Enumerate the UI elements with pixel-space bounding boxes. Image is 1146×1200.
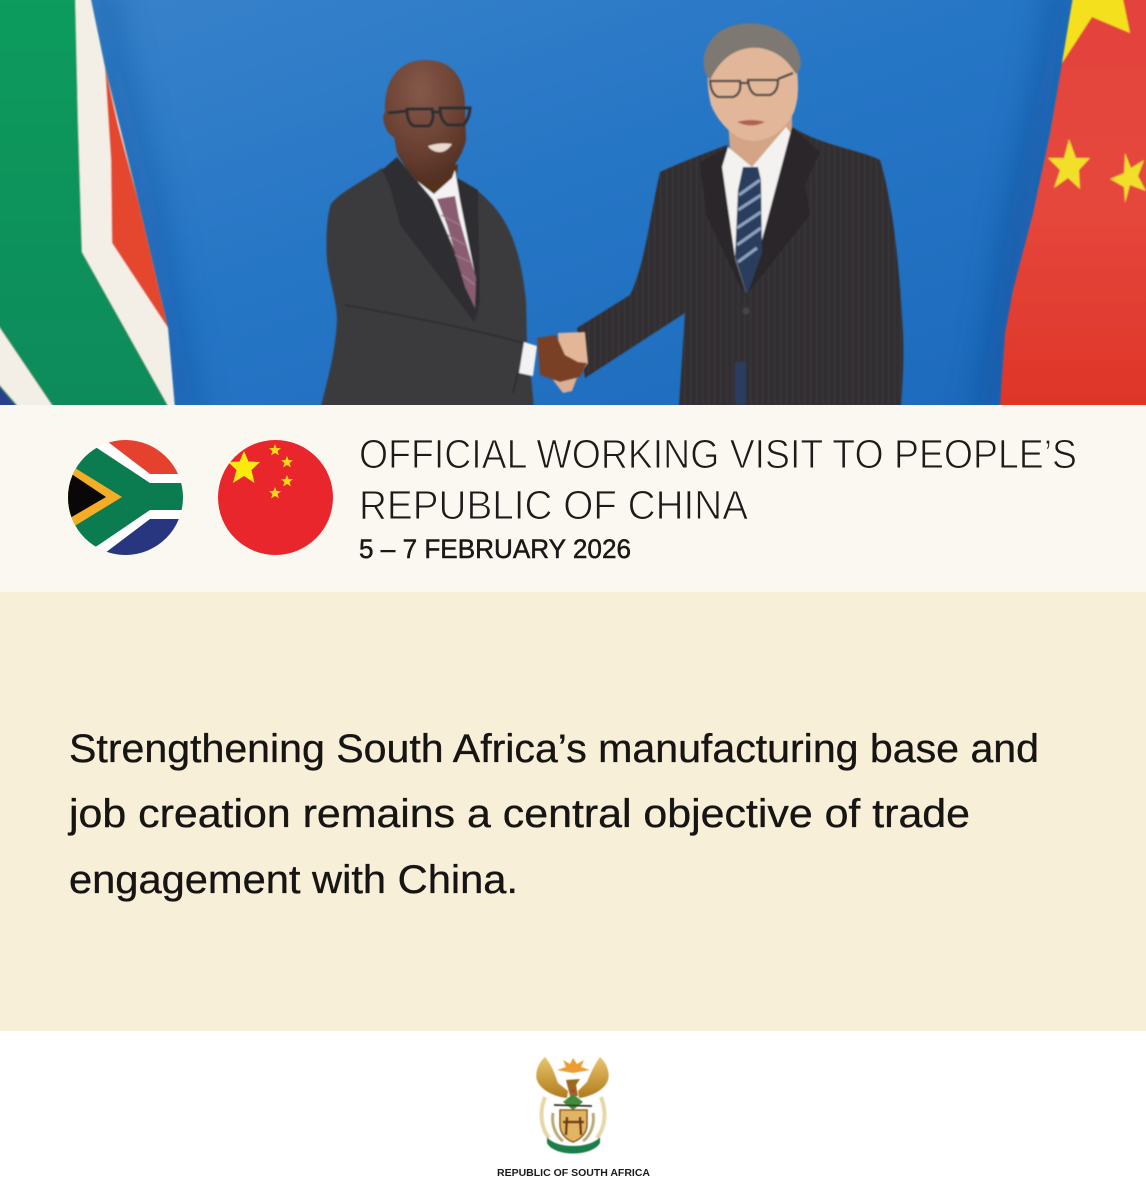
photo: two officials shaking hands between national flags (0, 0, 1146, 420)
hair (704, 23, 801, 80)
shirt (722, 127, 792, 292)
head (383, 60, 466, 182)
shirt (410, 170, 476, 272)
flag: South Africa draped (0, 0, 176, 420)
jacket (577, 127, 903, 420)
panel: statement (0, 592, 1146, 1031)
jacket (318, 168, 535, 420)
shield (560, 1110, 587, 1142)
heading: visit title: REPUBLIC OF CHINA (359, 482, 749, 528)
header band (0, 405, 1146, 592)
text: central statement (68, 727, 1039, 902)
tie (437, 196, 476, 308)
text: central statement: engagement with China. (69, 858, 518, 902)
icon: South African coat of arms (536, 1057, 609, 1154)
glasses (388, 108, 470, 126)
text: central statement: job creation remains a central objective of trade (68, 792, 970, 836)
text: central statement: Strengthening South Africa’s manufacturing base and (69, 727, 1039, 771)
wheat (553, 1113, 593, 1141)
side arcs (542, 1097, 549, 1138)
sun (557, 1058, 590, 1073)
button (742, 308, 750, 314)
sleeve crease and cuff (345, 305, 537, 393)
flag: China draped (999, 0, 1146, 420)
text: visit dates: 5 – 7 FEBRUARY 2026 (359, 534, 631, 564)
heading: visit title (359, 431, 1077, 528)
mouth (428, 143, 452, 152)
icon: South African flag circle (68, 440, 183, 555)
motto ribbon (547, 1137, 600, 1154)
secretary bird (566, 1079, 580, 1096)
tie (735, 167, 762, 295)
neck (398, 155, 458, 197)
person: right official (577, 23, 903, 420)
heading: visit title: OFFICIAL WORKING VISIT TO PEOPLE’S (359, 431, 1077, 477)
mouth (737, 120, 765, 126)
glasses (710, 73, 793, 97)
clasped hands (537, 332, 588, 393)
text: Republic of South Africa: REPUBLIC OF SOUTH AFRICA (497, 1167, 650, 1179)
spear and knobkerrie (554, 1105, 592, 1106)
lapels (702, 147, 740, 284)
head (708, 47, 798, 141)
neck (728, 116, 794, 168)
wings (536, 1057, 568, 1098)
lapels (382, 157, 476, 322)
icon: Chinese flag circle (216, 438, 336, 558)
person: left official (318, 60, 537, 420)
